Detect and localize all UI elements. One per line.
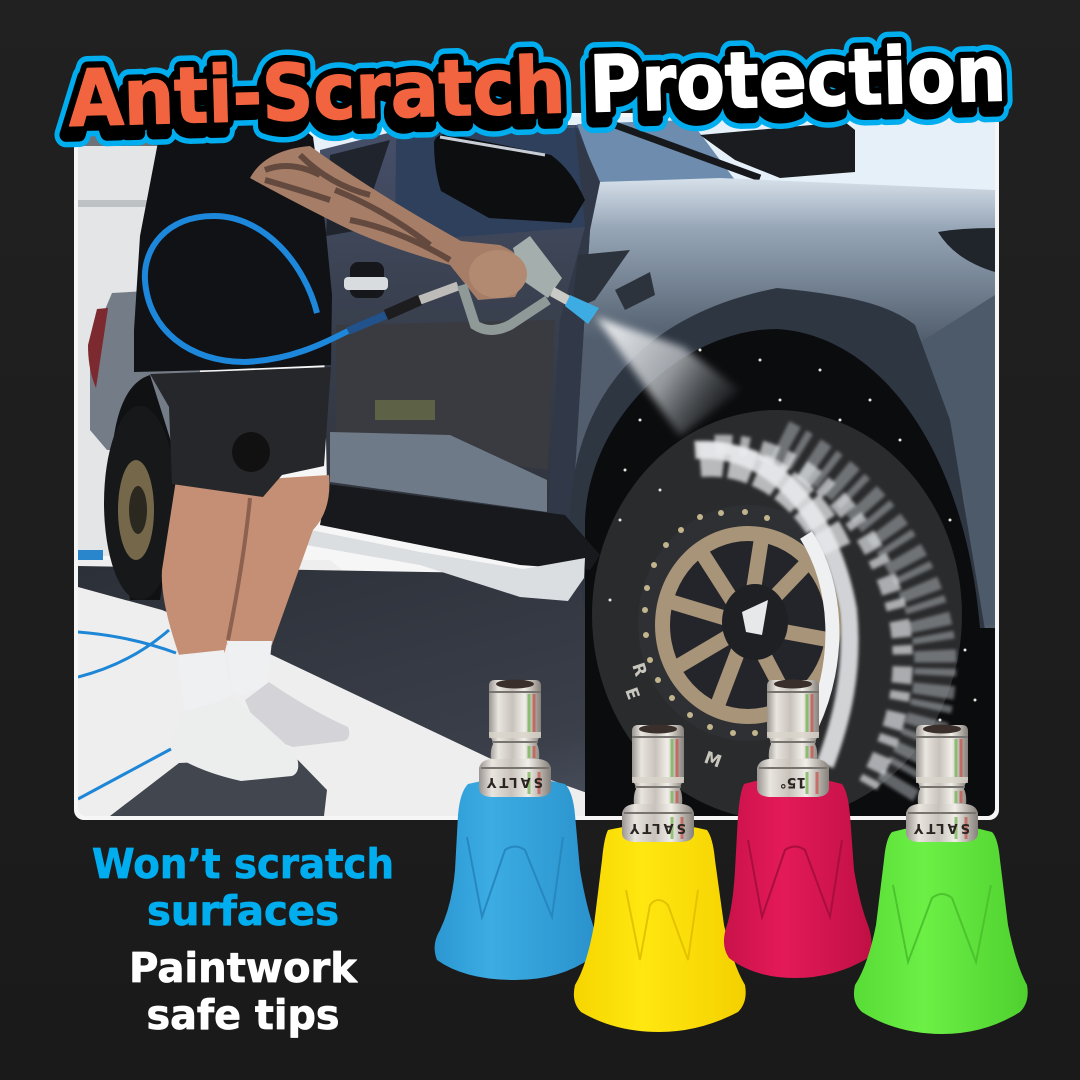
heading outline black: Protection [584,38,1004,140]
driveway: wet dark concrete [78,566,995,816]
heading outline black: Protection [588,29,1007,131]
heading outline black [63,29,1008,154]
nozzle tip [550,287,599,324]
t-shirt [134,117,332,372]
wheel arch opening [585,329,995,816]
heading outline blue: Anti-Scratch [64,50,563,154]
windshield [577,120,735,182]
door seam pillar [548,125,600,520]
nozzle tip: yellow: SALTY [629,820,686,835]
tyre side lettering: R [627,660,650,679]
heading outline blue: Anti-Scratch [67,41,567,145]
heading word: Anti-Scratch: Anti-Scratch [67,41,567,145]
spray gun [462,236,562,330]
side mirror [434,134,585,223]
arm tattoos [265,155,450,260]
nozzle tip: blue [435,680,595,980]
tyre side lettering: M [701,748,724,772]
panel: photo frame [74,113,999,820]
heading outline black: Anti-Scratch [64,50,563,154]
text block: won't scratch surfaces: Won’t scratch [92,840,394,888]
heading outline blue: Protection [584,38,1004,140]
lance [348,286,458,331]
rim bead dots [642,509,770,736]
garage wall [78,136,158,560]
text block: won't scratch surfaces [92,840,394,935]
nozzle tip: blue: SALTY [486,774,543,789]
door handle [344,262,388,298]
heading outline blue: Protection [588,29,1007,131]
sneakers [172,682,349,781]
tattooed arm [250,146,527,300]
photo: man washing a truck tyre [78,117,995,820]
door sill [320,484,600,570]
door reflection: dark [336,320,555,470]
hand [469,250,527,298]
text block: paintwork safe tips [129,944,359,1039]
nozzle tip: green [854,724,1028,1034]
nozzle tip: red [724,680,872,978]
foam on tyre tread [695,440,935,790]
tyre side lettering [626,662,722,768]
headlight [938,228,995,272]
shadow patch on the ground [110,758,327,816]
truck cab and door [320,125,600,545]
text block: paintwork safe tips: safe tips [146,991,340,1039]
side step [306,529,585,601]
sun visor [700,122,855,178]
wheel arch lip [570,288,985,640]
blue hose [145,216,348,362]
socks [178,641,272,655]
rear wheel [104,375,180,600]
tyre side lettering: E [620,685,643,703]
man's legs [162,475,329,655]
water spray [596,317,740,436]
text block: won't scratch surfaces: surfaces [147,887,339,935]
front tyre [592,410,962,820]
truck rear bed [90,288,200,450]
shorts tear [232,432,270,472]
wheel rim [655,526,841,725]
sky [308,117,995,190]
title: Anti-Scratch Protection [63,29,1008,154]
door reflection: lawn [375,400,435,420]
nozzle tip: green: SALTY [913,820,970,835]
rear tail light [88,308,108,388]
door window glass [395,128,590,242]
nozzle tip: yellow [574,724,746,1032]
heading outline black: Anti-Scratch [67,41,567,145]
water droplets on wheel arch [608,348,976,722]
hood vent shadows [572,250,655,310]
ground hoses [78,630,176,799]
gap between legs [228,498,250,640]
windshield wiper [615,125,760,178]
truck hood and front fender [572,178,995,640]
heading word: Protection: Protection [588,29,1007,131]
driveway: sunlit concrete [78,560,103,566]
mirror highlight [440,137,545,155]
heading outline blue [63,29,1008,154]
text block: paintwork safe tips: Paintwork [129,944,359,992]
rear door window [326,140,390,236]
door reflection: lower light [330,432,547,512]
fender lower panel [928,295,995,338]
shorts [150,367,331,497]
nozzle tip: red: 15° [780,774,806,790]
